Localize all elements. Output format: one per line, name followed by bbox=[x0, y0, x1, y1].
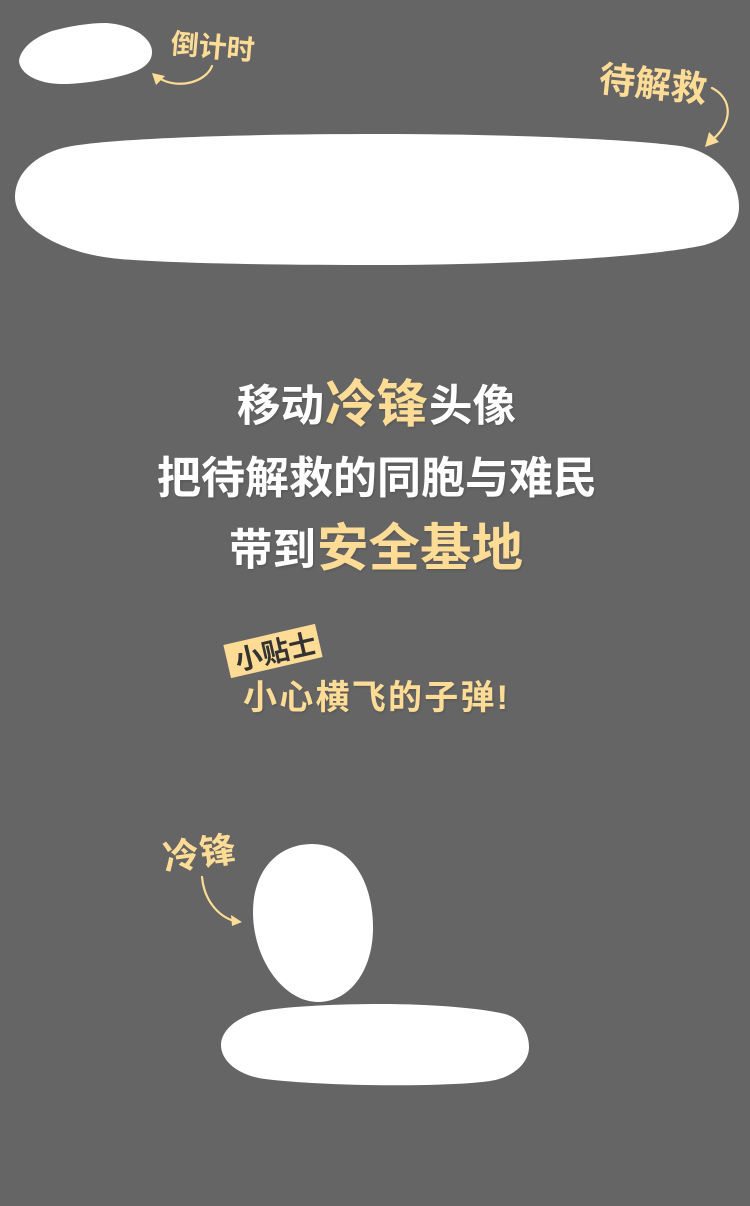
headline line 1: 移动 bbox=[237, 383, 324, 431]
label: awaiting rescue: 待解救 bbox=[597, 58, 709, 110]
headline line 3: 安全基地 bbox=[317, 519, 523, 577]
headline bbox=[157, 375, 597, 577]
headline line 2: 把待解救的同胞与难民 bbox=[157, 454, 597, 503]
headline line 1: 头像 bbox=[429, 383, 516, 431]
arrow: to countdown blob bbox=[152, 66, 212, 85]
awaiting rescue placeholder bar bbox=[15, 134, 739, 265]
avatar base placeholder bbox=[221, 1004, 529, 1085]
arrow: to rescue bar bbox=[705, 88, 728, 147]
label: vanguard: 冷锋 bbox=[160, 828, 238, 879]
avatar placeholder head bbox=[253, 844, 373, 1002]
headline line 1: 冷锋 bbox=[325, 375, 428, 433]
headline line 3: 带到 bbox=[229, 527, 316, 575]
tip text: 小心横飞的子弹! bbox=[243, 679, 508, 717]
tip tag: 小贴士 bbox=[232, 628, 319, 676]
label: countdown: 倒计时 bbox=[169, 28, 256, 66]
arrow: to avatar bbox=[202, 877, 242, 926]
countdown placeholder blob bbox=[19, 23, 152, 84]
